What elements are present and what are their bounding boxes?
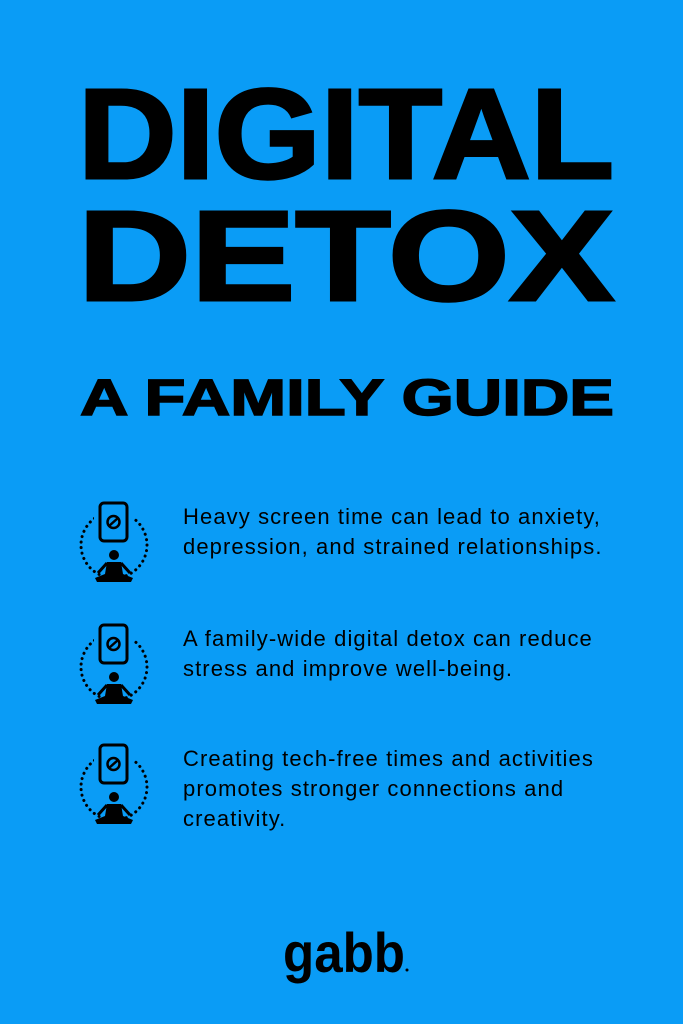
title: DIGITAL: [78, 63, 614, 206]
title: A FAMILY GUIDE: [80, 369, 614, 426]
icon: phone and meditation: [80, 624, 148, 704]
item 1: [80, 502, 603, 582]
text 1: Heavy screen time can lead to anxiety, depression, and strained relationships.: [183, 504, 603, 559]
item 2: [80, 624, 593, 704]
title: [78, 63, 616, 426]
logo: gabb: gabb: [283, 921, 405, 984]
title: DETOX: [78, 185, 614, 328]
icon: phone and meditation: [80, 744, 148, 824]
text 3: Creating tech-free times and activities promotes stronger connections and creativity.: [183, 746, 594, 831]
icon: phone and meditation: [80, 502, 148, 582]
text 2: A family-wide digital detox can reduce stress and improve well-being.: [183, 626, 593, 681]
item 3: [80, 744, 594, 831]
